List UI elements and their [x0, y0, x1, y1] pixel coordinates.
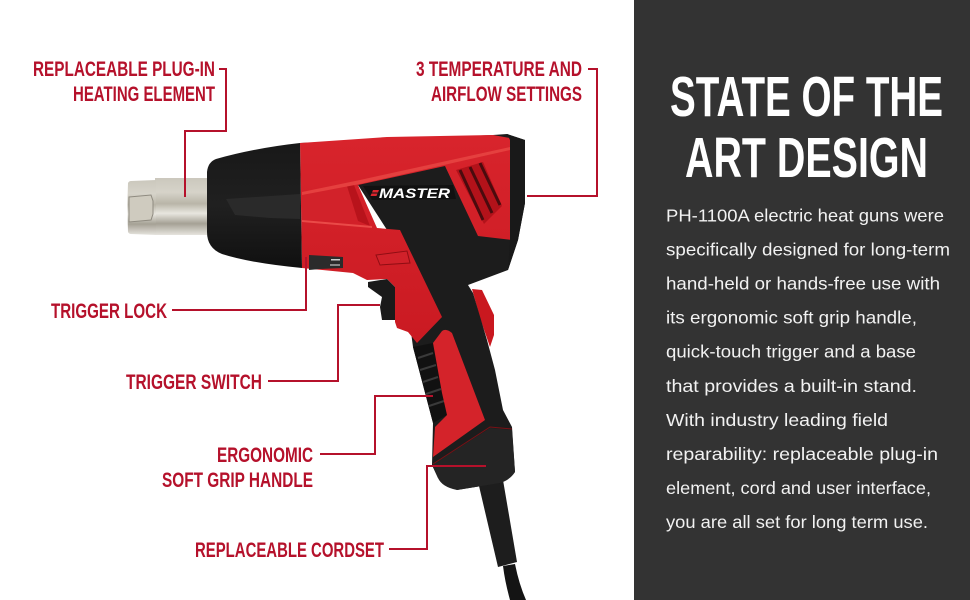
rear cap: [507, 134, 525, 270]
body text: reparability: replaceable plug-in: [666, 444, 938, 464]
body text: specifically designed for long-term: [666, 240, 950, 260]
black front shroud: [207, 143, 302, 268]
red main housing: [300, 135, 512, 343]
callout: replaceable plug-in heating element: [33, 58, 226, 197]
body text: [666, 206, 950, 532]
callout: trigger lock: [51, 257, 306, 323]
base cap seam: [433, 427, 512, 464]
rear red button: [472, 289, 494, 347]
body text: you are all set for long term use.: [666, 512, 928, 532]
callout: trigger switch: [126, 305, 380, 394]
grip ribs: [413, 343, 447, 423]
MASTER logo: MASTER: [379, 185, 451, 201]
red grip panel: [433, 330, 485, 457]
settings label: [309, 255, 343, 270]
callout: replaceable cordset: [195, 466, 486, 562]
callout: temperature and airflow settings: [416, 58, 597, 196]
red body crease: [302, 147, 510, 228]
body text: hand-held or hands-free use with: [666, 274, 940, 294]
panel background: [634, 0, 970, 600]
body text: that provides a built-in stand.: [666, 376, 917, 396]
black body and handle silhouette: [300, 134, 525, 490]
heat gun product illustration: [128, 134, 526, 600]
body text: PH-1100A electric heat guns were: [666, 206, 944, 226]
body text: element, cord and user interface,: [666, 478, 931, 498]
callout: replaceable plug-in heating element: REPLACEABLE PLUG-IN: [33, 58, 215, 81]
callout: replaceable cordset: REPLACEABLE CORDSET: [195, 539, 384, 562]
handle base cap: [432, 428, 515, 490]
callout: trigger switch: TRIGGER SWITCH: [126, 371, 262, 394]
power cord: [479, 480, 526, 600]
callout: ergonomic soft grip handle: ERGONOMIC: [217, 444, 313, 467]
callout: temperature and airflow settings: AIRFLOW SETTINGS: [431, 83, 582, 106]
shroud recess: [226, 194, 300, 219]
callout: temperature and airflow settings: 3 TEMPERATURE AND: [416, 58, 582, 81]
callout: replaceable plug-in heating element: HEATING ELEMENT: [73, 83, 215, 106]
trigger: [368, 279, 395, 320]
body text: quick-touch trigger and a base: [666, 342, 916, 362]
trigger lock button: [376, 251, 410, 265]
callout: trigger lock: TRIGGER LOCK: [51, 300, 167, 323]
body text: its ergonomic soft grip handle,: [666, 308, 917, 328]
body text: With industry leading field: [666, 410, 888, 430]
panel: state of the art design: [634, 0, 970, 600]
metal nozzle: [128, 178, 208, 235]
callout: ergonomic soft grip handle: [162, 396, 433, 492]
MASTER logo: [363, 185, 456, 201]
callout: ergonomic soft grip handle: SOFT GRIP HANDLE: [162, 469, 313, 492]
vent grille: [456, 162, 502, 224]
heading: [670, 65, 943, 190]
